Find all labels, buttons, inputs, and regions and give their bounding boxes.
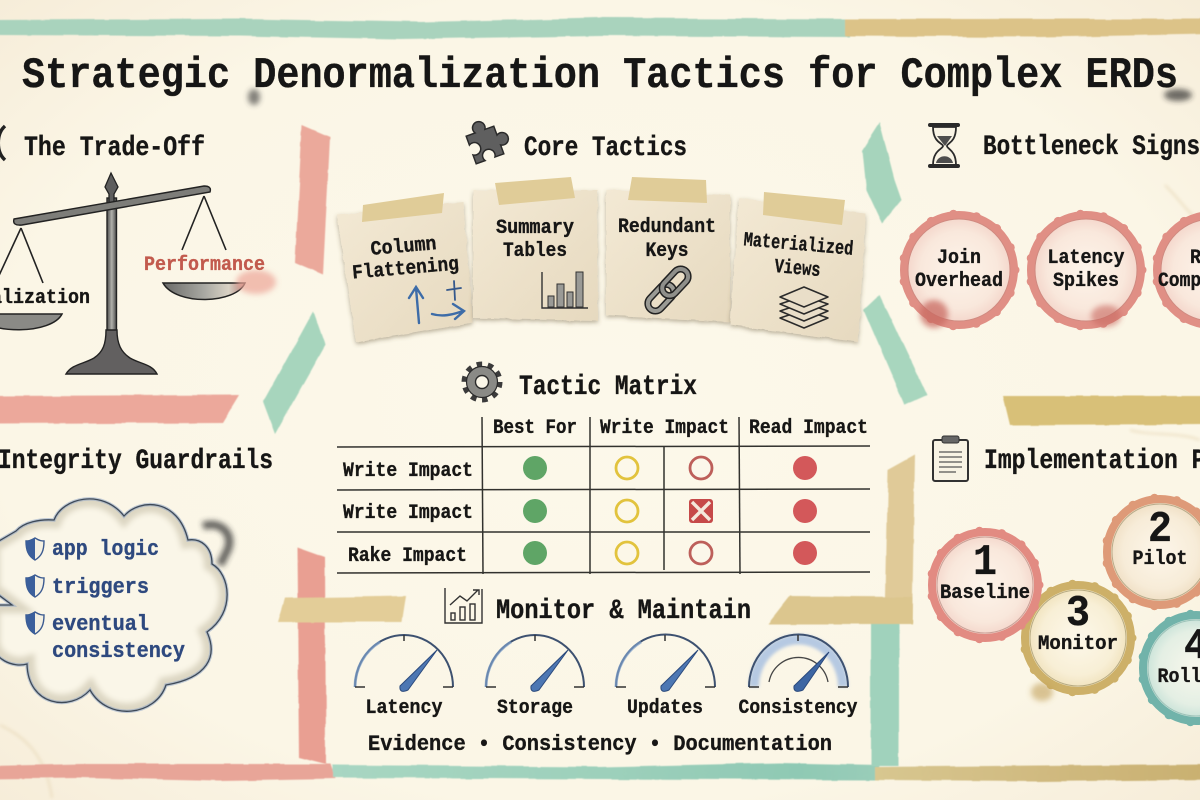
card: materialized views: Views	[773, 256, 821, 283]
ink smudge near title left	[248, 89, 260, 105]
shield: app logic	[26, 538, 44, 560]
icon: growth chart	[445, 588, 482, 623]
card: materialized views	[730, 192, 866, 342]
tape: green top right	[862, 122, 902, 224]
tape: green diagonal right	[864, 295, 927, 405]
seal: join overhead	[903, 214, 1015, 328]
text: app logic: app logic	[52, 537, 159, 562]
heading: tactic matrix: Tactic Matrix	[519, 372, 697, 403]
row labels	[343, 460, 473, 568]
gauge: updates	[616, 634, 715, 691]
status icon: cross	[692, 502, 710, 520]
tape: ochre horizontal right	[1003, 396, 1200, 425]
top watercolor band	[0, 18, 1200, 39]
panel: bottleneck signs	[903, 123, 1200, 328]
tape: tan vertical right	[885, 455, 915, 623]
step 2: pilot: 2	[1148, 505, 1172, 555]
step 1: baseline: 1	[973, 538, 997, 588]
text: triggers: triggers	[52, 575, 149, 600]
step 4: rollout	[1142, 614, 1200, 722]
card: materialized views: Materialized	[743, 229, 854, 262]
table header: Write Impact	[600, 417, 729, 440]
stain: performance pan	[236, 270, 276, 294]
card: summary tables: Tables	[503, 240, 567, 263]
label: performance: Performance	[144, 254, 265, 277]
icon: puzzle piece	[463, 114, 513, 164]
status dots: yellow column	[616, 457, 638, 564]
seal: join overhead: Join	[937, 247, 981, 270]
table header: Best For	[493, 417, 577, 440]
step 3: monitor: 3	[1066, 589, 1090, 639]
seal: read complexity	[1156, 214, 1200, 326]
step 3: monitor: Monitor	[1038, 633, 1118, 656]
heading: integrity guardrails: Integrity Guardrails	[0, 446, 273, 477]
table header: Read Impact	[749, 417, 868, 440]
panel: integrity guardrails	[0, 446, 273, 711]
cloud callout	[0, 499, 227, 711]
text: consistency: consistency	[52, 639, 185, 664]
step 2: pilot: Pilot	[1132, 548, 1188, 571]
card: redundant keys: Redundant	[618, 216, 716, 239]
panel: implementation plan	[931, 436, 1200, 722]
icon: balance scale	[0, 173, 245, 374]
status dots: green column	[523, 456, 547, 565]
panel: the trade-off	[0, 126, 276, 374]
icon: hourglass	[928, 123, 960, 168]
icon: trade-off partial	[0, 126, 5, 160]
panel: tactic matrix	[337, 365, 870, 574]
seal: join overhead: Overhead	[915, 270, 1003, 293]
tape: tan right of monitor	[768, 596, 912, 624]
tape: red vertical upper	[295, 125, 330, 274]
shield: eventual consistency	[26, 612, 44, 634]
step 3: monitor	[1024, 584, 1132, 701]
label: consistency: Consistency	[738, 697, 858, 720]
seal: latency spikes: Latency	[1048, 247, 1124, 270]
step 1: baseline: Baseline	[940, 582, 1030, 605]
tape: tan left of monitor	[278, 596, 406, 622]
card: redundant keys: Keys	[646, 240, 688, 263]
card: column flattening: Column	[370, 233, 437, 262]
step 2: pilot	[1106, 498, 1200, 606]
heading: monitor and maintain: Monitor & Maintain	[496, 596, 751, 627]
step 1: baseline	[931, 531, 1039, 639]
gauge: latency	[355, 635, 453, 691]
tape: green vertical lower right	[871, 622, 899, 766]
icon: clipboard	[933, 436, 968, 481]
panel: core tactics	[337, 114, 866, 342]
label: storage: Storage	[497, 697, 573, 720]
table header	[493, 417, 868, 440]
heading: the trade-off: The Trade-Off	[24, 133, 205, 164]
gauge: consistency	[749, 634, 848, 691]
bottom watercolor band	[0, 763, 1200, 781]
row labels: Write Impact	[343, 460, 473, 483]
tape: red vertical lower	[297, 547, 326, 764]
ink smudge near title right	[1164, 89, 1192, 101]
smudge by cloud	[203, 525, 229, 565]
card: redundant keys	[606, 177, 730, 322]
card: column flattening: Flattening	[351, 253, 460, 286]
panel: monitor and maintain	[355, 588, 858, 757]
paper creases	[0, 185, 1200, 798]
heading: core tactics: Core Tactics	[524, 133, 687, 164]
footer line: Evidence • Consistency • Documentation	[368, 732, 832, 757]
seal: latency spikes: Spikes	[1053, 270, 1119, 293]
card: summary tables: Summary	[496, 217, 574, 240]
text: eventual: eventual	[52, 612, 149, 637]
tape: red horizontal left	[0, 395, 239, 424]
status dots: red outline column	[689, 457, 713, 564]
label: latency: Latency	[366, 697, 442, 720]
tape: green diagonal left	[263, 311, 325, 434]
table grid	[337, 417, 870, 574]
status dots: red column	[793, 456, 817, 565]
icon: gear	[465, 365, 499, 399]
seal: latency spikes	[1030, 214, 1142, 327]
card: summary tables	[473, 177, 598, 321]
row labels: Rake Impact	[348, 545, 467, 568]
row labels: Write Impact	[343, 502, 473, 525]
shield: triggers	[26, 575, 44, 597]
card: column flattening	[337, 193, 473, 342]
gauge: storage	[486, 635, 584, 691]
label: updates: Updates	[627, 697, 703, 720]
